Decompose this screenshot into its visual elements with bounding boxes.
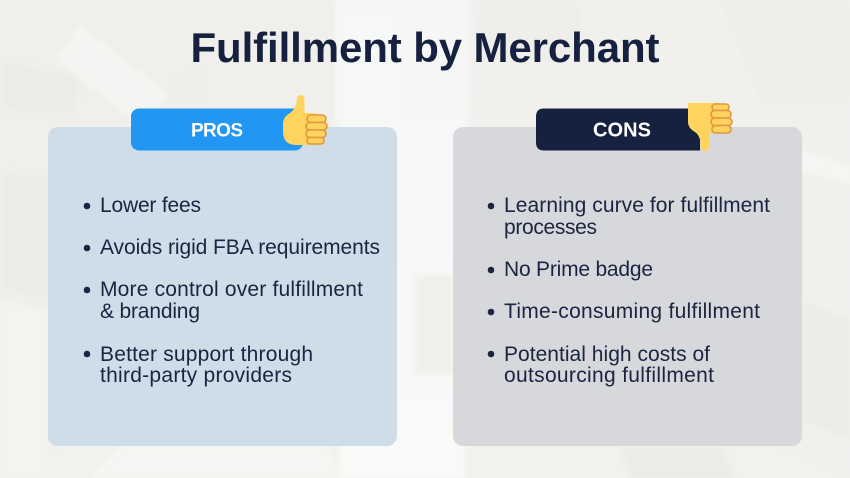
icon: thumbs down	[688, 103, 732, 151]
badge: pros: PROS	[191, 120, 243, 142]
bullet list: pros: third-party providers	[100, 364, 292, 387]
bullet list: pros	[84, 194, 380, 387]
badge: cons	[536, 108, 700, 150]
bullet list: cons	[488, 194, 770, 387]
bullet list: pros: Better support through	[100, 343, 313, 366]
bullet list: cons: No Prime badge	[504, 258, 653, 281]
bullet list: pros: & branding	[100, 300, 200, 323]
bullet list: pros: Avoids rigid FBA requirements	[100, 236, 380, 259]
bullet list: cons: Learning curve for fulfillment	[504, 194, 770, 217]
bullet list: cons: processes	[504, 216, 597, 239]
bullet list: cons: Time-consuming fulfillment	[504, 300, 760, 323]
icon: thumbs up	[283, 95, 327, 145]
bullet list: cons: outsourcing fulfillment	[504, 364, 714, 387]
badge: cons: CONS	[593, 120, 651, 142]
panel: pros	[48, 127, 397, 446]
title: Fulfillment by Merchant	[190, 24, 660, 71]
bullet list: pros: More control over fulfillment	[100, 278, 363, 301]
badge: pros	[131, 108, 303, 150]
bullet list: pros: Lower fees	[100, 194, 201, 217]
bullet list: cons: Potential high costs of	[504, 343, 710, 366]
panel: cons	[453, 127, 802, 446]
